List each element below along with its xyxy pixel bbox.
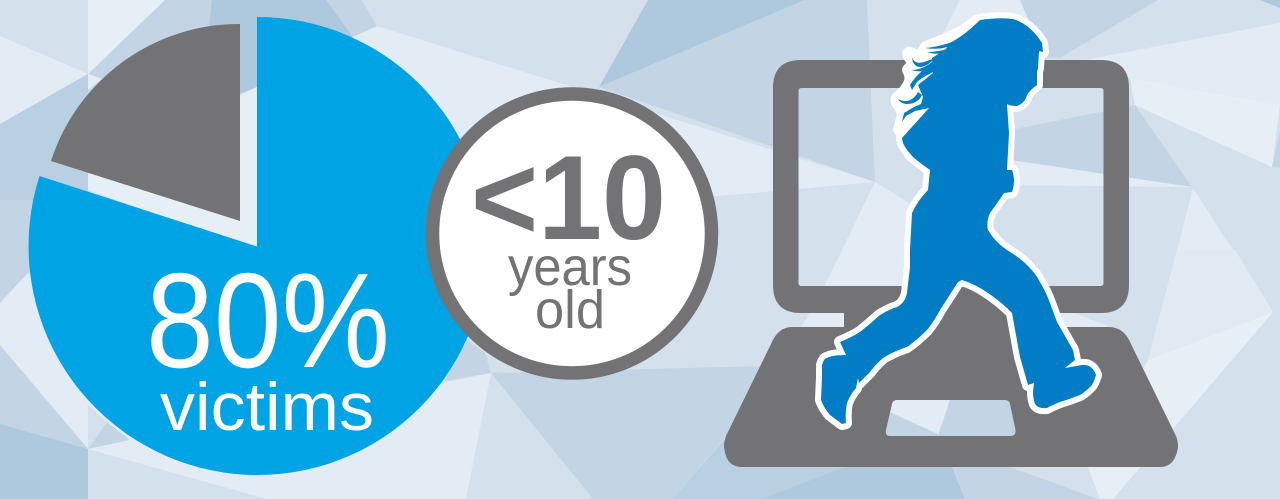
badge number: under 10: <10 xyxy=(471,131,666,265)
badge circle xyxy=(432,94,712,373)
label: victims: victims xyxy=(160,369,374,445)
pie slice: remaining 20% xyxy=(51,24,240,221)
silhouette hair outline xyxy=(892,16,975,140)
label: 80%: 80% xyxy=(146,245,390,396)
laptop screen xyxy=(773,60,1129,313)
silhouette hair wisps xyxy=(898,42,952,104)
icon: running girl silhouette xyxy=(821,16,1096,424)
pie chart xyxy=(29,17,487,475)
silhouette body xyxy=(821,18,1096,424)
age badge xyxy=(432,94,712,373)
badge text: years: years xyxy=(508,237,632,297)
pie slice: 80% victims xyxy=(29,17,487,475)
laptop base with trackpad xyxy=(724,327,1178,467)
icon: laptop computer xyxy=(724,60,1178,467)
laptop hinge xyxy=(844,312,1040,329)
badge text: old: old xyxy=(535,280,605,340)
